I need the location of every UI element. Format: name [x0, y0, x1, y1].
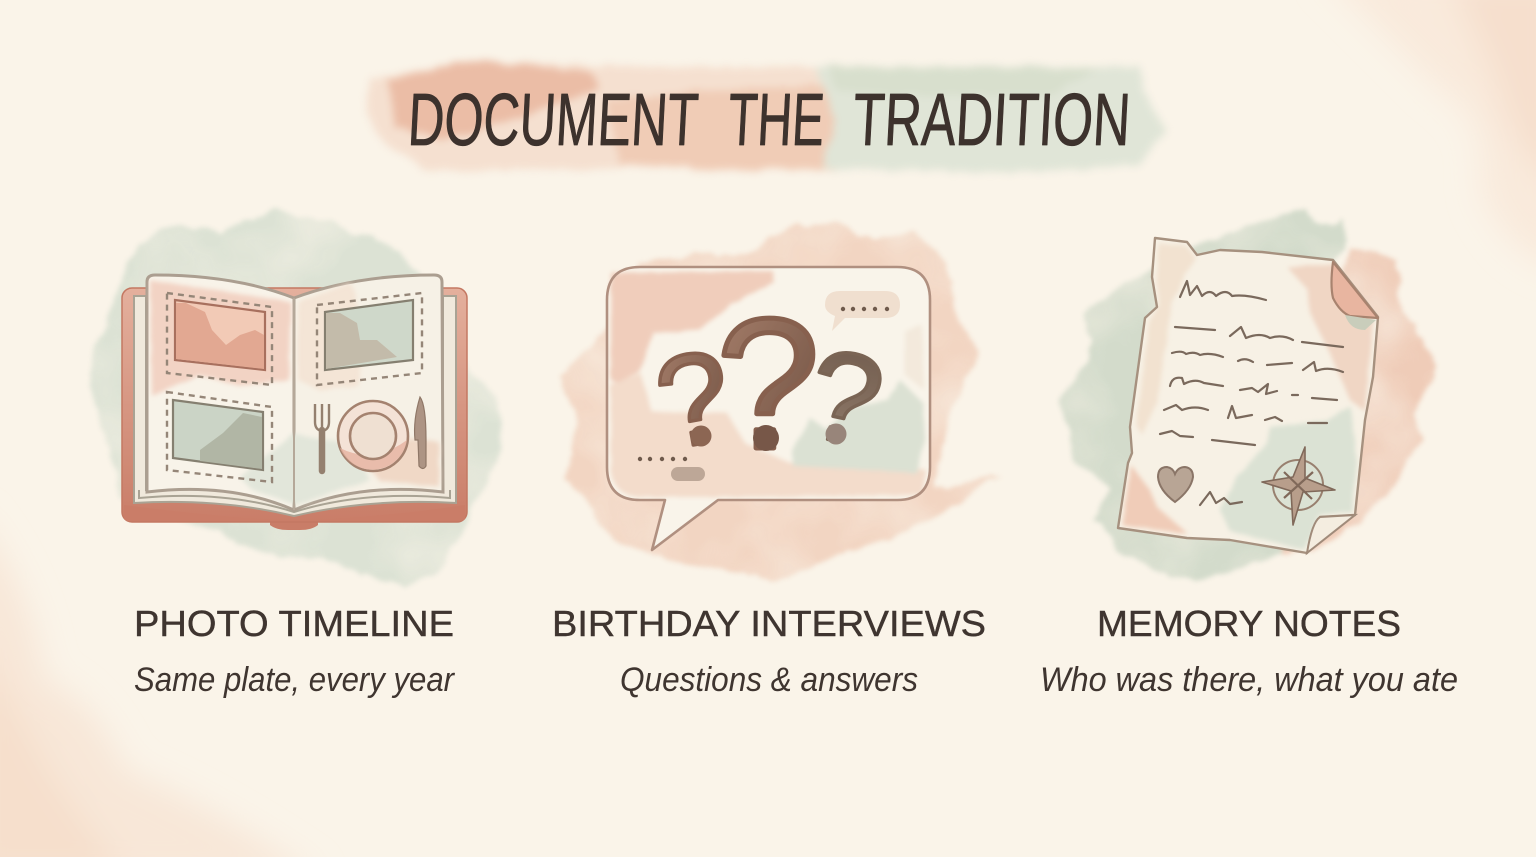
title — [406, 78, 1133, 161]
title: THE — [726, 78, 827, 161]
title: DOCUMENT — [406, 78, 701, 161]
photo: bottom left — [167, 392, 272, 482]
panel: photo timeline — [90, 208, 501, 587]
small bubble: top right — [825, 291, 900, 331]
icon: compass rose — [1262, 447, 1335, 525]
page stacks — [134, 296, 456, 516]
caption: photo timeline: Same plate, every year — [134, 661, 456, 699]
label: birthday interviews: BIRTHDAY INTERVIEWS — [552, 603, 986, 644]
icon: old paper letter — [1118, 238, 1378, 553]
icon: question marks: ? — [645, 321, 742, 477]
caption: memory notes: Who was there, what you ate — [1040, 661, 1458, 699]
handwriting lines — [1160, 281, 1343, 505]
photo: top right — [317, 293, 422, 385]
title: TRADITION — [851, 78, 1133, 161]
icon: heart — [1158, 467, 1193, 502]
right page — [294, 275, 443, 510]
left page — [147, 275, 294, 510]
icon: question marks: ? — [716, 281, 820, 488]
watercolor wash: speech bubble — [560, 223, 1003, 580]
panel: memory notes — [1060, 207, 1438, 583]
corner wash: bottom left — [0, 510, 320, 857]
watercolor wash: book — [90, 208, 501, 587]
icon: plate and cutlery — [315, 397, 426, 471]
label: photo timeline: PHOTO TIMELINE — [134, 603, 454, 644]
icon: question marks: ? — [795, 321, 894, 476]
caption: birthday interviews: Questions & answers — [620, 661, 918, 699]
icon: speech bubble — [607, 267, 930, 550]
panel: birthday interviews — [560, 223, 1003, 580]
corner wash: top right — [1320, 0, 1536, 270]
label: memory notes: MEMORY NOTES — [1097, 603, 1401, 644]
title banner — [367, 60, 1165, 173]
icon: question marks — [645, 281, 894, 488]
icon: open photo book — [122, 275, 467, 530]
photo: top left — [167, 293, 272, 385]
watercolor wash: note — [1060, 207, 1438, 583]
small marks: lower left — [638, 457, 705, 481]
book cover — [122, 288, 467, 530]
